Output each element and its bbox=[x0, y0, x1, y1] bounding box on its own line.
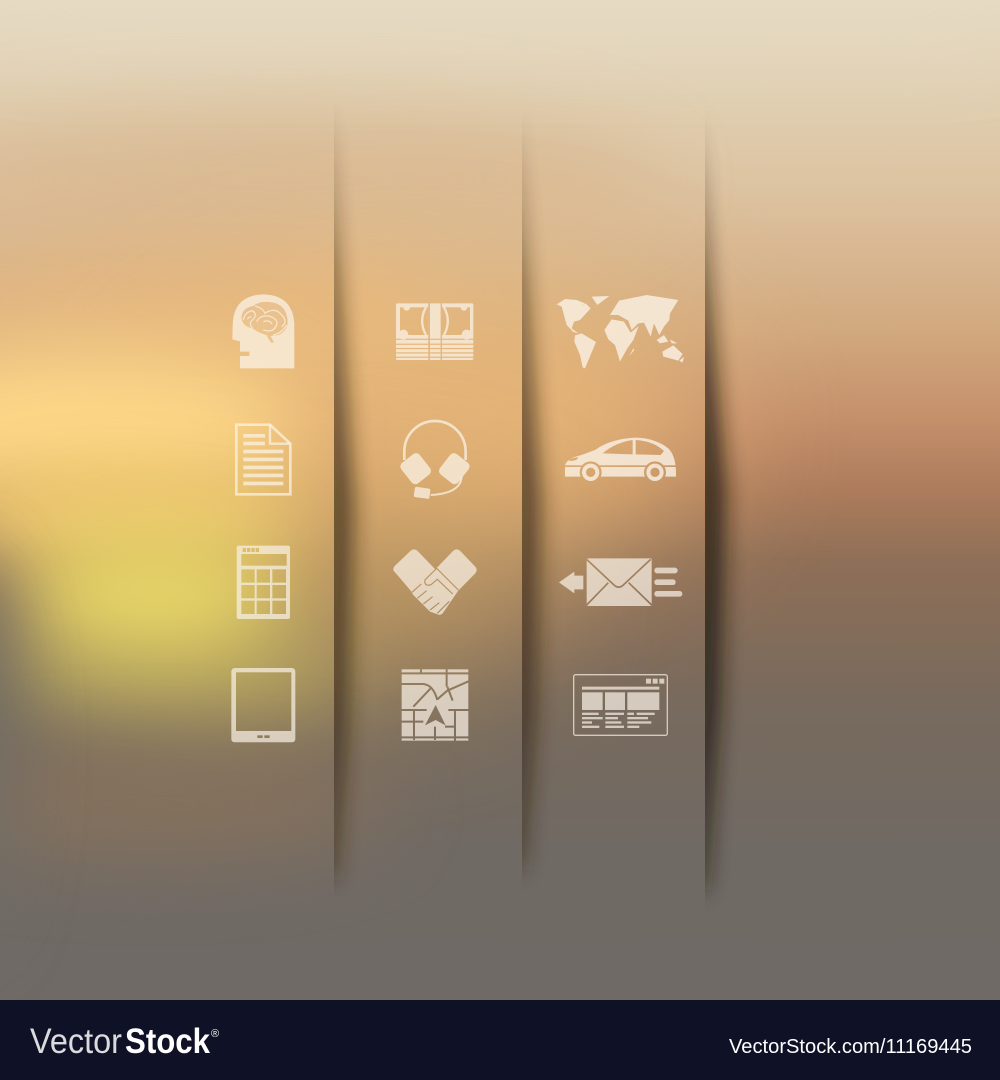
image id text: VectorStock.com/11169445 bbox=[729, 1036, 972, 1058]
footer bar bbox=[0, 1000, 1000, 1080]
icon group: third column, bottom bbox=[559, 558, 682, 735]
icon: head with brain bbox=[232, 294, 294, 368]
logo: VectorStock: Vector bbox=[30, 1022, 122, 1061]
icon: email sending bbox=[559, 558, 682, 606]
shadow: third panel edge bbox=[510, 110, 541, 870]
logo: VectorStock bbox=[30, 1022, 219, 1061]
icon: banknote stacks bbox=[396, 303, 473, 360]
shadow: fourth panel edge bbox=[693, 110, 726, 890]
icon: document bbox=[236, 425, 290, 494]
icon: calculator bbox=[237, 546, 290, 619]
icon: street map bbox=[402, 669, 468, 741]
logo: VectorStock: ® bbox=[211, 1028, 219, 1040]
icon: headset bbox=[398, 421, 472, 499]
icon: world map bbox=[557, 295, 684, 368]
icon: web page layout bbox=[574, 675, 667, 735]
icon group: first and second columns, top bbox=[232, 294, 473, 499]
shadow: second panel edge bbox=[322, 100, 354, 880]
icon: handshake bbox=[393, 549, 477, 615]
icon: car bbox=[565, 438, 676, 481]
panel: column shadows bbox=[322, 100, 726, 890]
icon: tablet bbox=[231, 668, 295, 742]
icon group: first and second columns, bottom bbox=[231, 546, 477, 742]
icon group: third column, top bbox=[557, 295, 684, 481]
logo: VectorStock: Stock bbox=[125, 1022, 210, 1061]
